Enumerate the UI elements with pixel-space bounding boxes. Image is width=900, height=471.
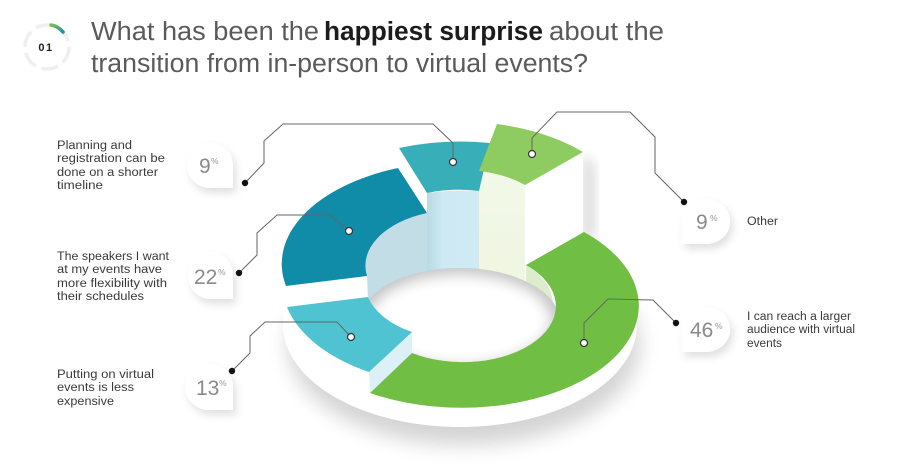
- text: speakers label: [57, 251, 170, 303]
- callout: 22% speakers: [188, 215, 352, 299]
- callout: 22% speakers: %: [218, 267, 226, 277]
- text: expense label: [57, 369, 154, 408]
- outer wall: light green segment: [525, 152, 583, 265]
- segment: cyan 13%: [287, 297, 412, 372]
- text: speakers label: more flexibility with: [57, 278, 167, 290]
- callout: 9% other: 9: [696, 211, 708, 234]
- callout: 22% speakers: 22: [194, 266, 217, 289]
- segment: teal 9%: [399, 142, 490, 193]
- text: larger audience label: I can reach a larger: [747, 311, 851, 323]
- 3D donut chart: [282, 124, 640, 445]
- inner wall: dark blue segment: [365, 213, 430, 300]
- text: planning label: done on a shorter: [57, 167, 158, 179]
- inner wall: teal segment: [427, 191, 479, 290]
- text: planning label: Planning and: [57, 140, 132, 152]
- callout: 46% larger audience: [580, 299, 730, 352]
- text: speakers label: at my events have: [57, 264, 162, 276]
- inner wall: light green segment: [479, 171, 525, 300]
- text: other label: Other: [747, 216, 778, 228]
- text: speakers label: The speakers I want: [57, 251, 170, 263]
- title: [91, 18, 664, 78]
- text: expense label: Putting on virtual: [57, 369, 154, 381]
- callout: 46% larger audience: 46: [690, 319, 713, 342]
- icon: question number badge: 01: [38, 42, 54, 54]
- text: planning label: timeline: [57, 180, 103, 192]
- text: larger audience label: events: [747, 338, 782, 350]
- text: expense label: events is less: [57, 382, 134, 394]
- inner floor: [369, 268, 556, 365]
- callout: 9% other: [528, 112, 730, 244]
- text: planning label: [57, 140, 165, 192]
- text: larger audience label: audience with virtual: [747, 324, 855, 336]
- callout: 13% expense: [185, 322, 354, 410]
- text: speakers label: their schedules: [57, 291, 144, 303]
- callout: 13% expense: 13: [196, 377, 219, 400]
- cut face: cyan segment: [369, 332, 412, 393]
- title: happiest surprise: [324, 18, 543, 46]
- text: expense label: expensive: [57, 396, 114, 408]
- callout: 46% larger audience: %: [715, 321, 723, 331]
- title: about the: [549, 18, 664, 46]
- segment: dark blue 22%: [282, 168, 427, 286]
- segment: light green 9%: [479, 124, 583, 185]
- callout: 9% planning: [187, 124, 456, 188]
- title: What has been the: [91, 18, 319, 46]
- inner wall: large green segment: [526, 265, 553, 320]
- title: transition from in-person to virtual events?: [91, 50, 588, 78]
- chart base: [283, 203, 637, 427]
- callout: 13% expense: %: [219, 378, 227, 388]
- side wall: teal segment: [398, 148, 427, 213]
- callout: 9% planning: 9: [199, 155, 211, 178]
- callout: 9% planning: %: [211, 156, 219, 166]
- segment: green 46%: [370, 232, 639, 408]
- text: larger audience label: [747, 311, 855, 350]
- text: planning label: registration can be: [57, 153, 165, 165]
- icon: question number badge: [25, 25, 69, 69]
- callout: 9% other: %: [710, 213, 718, 223]
